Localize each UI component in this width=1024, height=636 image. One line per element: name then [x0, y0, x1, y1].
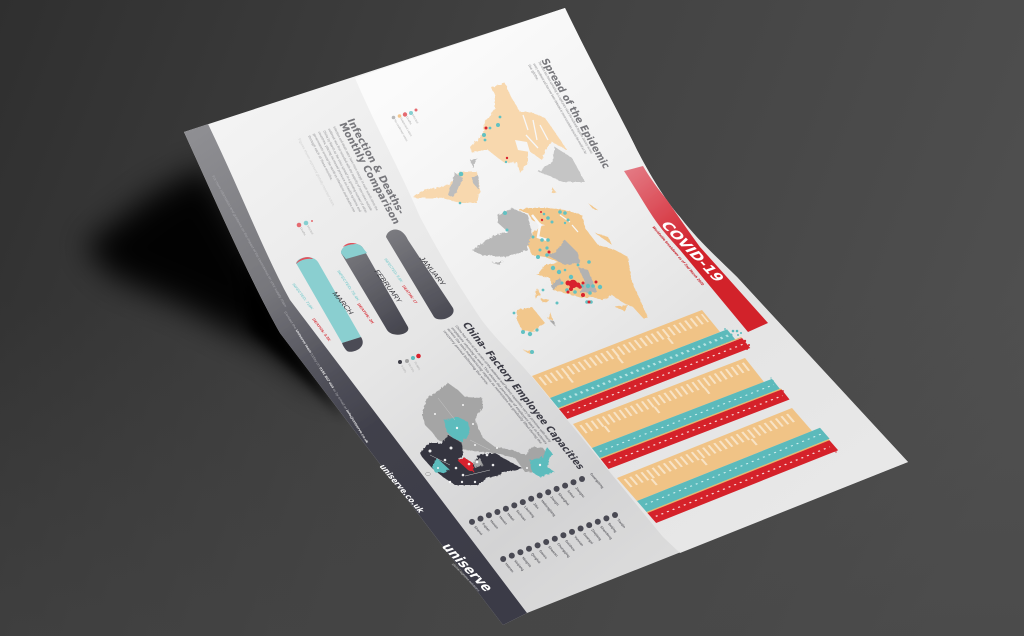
list: province dots row 1: Anhui: [566, 489, 576, 499]
list: province dots row 2: Beijing: [607, 522, 618, 533]
pill: February: DEATHS: 2K: [356, 303, 375, 325]
pill: February: INFECTED: 75.4K: [336, 270, 360, 301]
text: China description: China has been at the centre of the outbreak and factory capacities vary by province with many: [454, 325, 552, 443]
region: Hubei red: [457, 458, 474, 472]
legend: monthly comparison: [297, 220, 315, 237]
region group: teal east: [530, 447, 555, 477]
list: province dots row 1: Sichuan: [515, 509, 527, 522]
legend: world map: [392, 108, 420, 142]
list: province dots row 1: Shanxi: [473, 525, 483, 536]
region: central grey: [473, 458, 483, 468]
text: infection description: outbreak was first recorded with the majority of new cases outside: [327, 128, 373, 211]
list: province dots row 2: [500, 512, 626, 573]
band small print: [211, 175, 370, 444]
Hainan outline: [426, 472, 430, 476]
pill: January: JANUARY: [417, 256, 447, 287]
pill: January: DEATHS: 17: [401, 285, 418, 304]
text: spread description: The virus has been spreading at a rapid pace since the outbreak began in January across: [537, 61, 594, 154]
logo: global logistics solutions: [451, 563, 481, 592]
chart: China map: [420, 383, 555, 485]
list: province dots row 1: [469, 472, 605, 536]
legend: world map: Deaths: [405, 116, 413, 126]
banner: COVID-19: [624, 166, 768, 332]
pill: March: [291, 257, 363, 352]
legend: monthly comparison: Deaths: [299, 226, 307, 237]
logo: uniserve: [437, 542, 496, 593]
heading: Infection & Deaths: Monthly Comparison: [336, 121, 402, 226]
region borders: [430, 398, 490, 476]
region group: teal south: [432, 458, 450, 473]
pill: January: INFECTED: 9.8K: [383, 258, 404, 283]
list: province dots row 1: Heilongjiang: [540, 499, 556, 517]
list: province dots row 2: Chongqing: [556, 542, 571, 558]
text: China description: across the main manufacturing regions as restrictions are gradually lifted during the: [446, 328, 543, 444]
chart: country bars group 1: [532, 305, 750, 419]
list: province dots row 1: Jilin: [532, 502, 540, 510]
list: province dots row 1: Henan: [498, 515, 508, 526]
legend: China map: 75-90%: [413, 360, 422, 371]
poster sheet: [184, 8, 908, 625]
pill: March: DEATHS: 3.3K: [311, 318, 332, 342]
list: province dots row 2: Yunnan: [573, 535, 584, 547]
region group: dark: [420, 435, 522, 485]
paper shadow: [85, 165, 345, 420]
list: province dots row 1: Fujian: [481, 522, 491, 532]
list: province dots row 2: Ningxia: [521, 556, 532, 568]
list: province dots row 1: Liaoning: [523, 505, 535, 518]
legend: world map: No confirmed cases: [393, 118, 409, 142]
land masses: [413, 83, 648, 354]
heading: Spread of the Epidemic: Spread of the Epidemic: [538, 57, 612, 170]
banner title: COVID-19: [656, 220, 727, 284]
pill: January: [383, 229, 454, 319]
list: province dots row 2: Zhejiang: [590, 528, 602, 541]
pill: March: MARCH: [330, 291, 354, 315]
list: province dots row 2: Tianjin: [616, 518, 626, 529]
legend: world map: Suspected cases: [399, 116, 414, 137]
legend: world map: Infected: [411, 114, 420, 125]
panel: left column: [184, 8, 908, 625]
region markers: [428, 404, 541, 483]
banner subtitle: Worldwide breakdown as of 2nd March 2020: [651, 226, 705, 286]
heading: Infection & Deaths: Infection & Deaths-: [344, 117, 406, 216]
text: infection description: countries, placing increased pressure on health systems and: [317, 131, 362, 212]
legend: China map: [398, 354, 422, 374]
list: province dots row 2: Gansu: [538, 549, 548, 560]
text: spread description: the globe.: [527, 64, 540, 81]
list: province dots row 2: Xinjiang: [513, 559, 525, 572]
outbreak markers: [459, 116, 602, 354]
list: province dots row 1: Jiangxi: [549, 495, 560, 507]
list: province dots row 1: Guangdong: [589, 472, 605, 489]
text: China description: employees returning to work. This shows the percentage of employees back in factories: [450, 327, 548, 445]
legend: monthly comparison: Infected: [306, 224, 315, 236]
text: infection description: China by March as the virus spread to a growing number of other: [322, 130, 368, 214]
text: infection description: through each of these months.: [307, 135, 334, 181]
lake: [515, 140, 530, 152]
chart: monthly pills: [291, 229, 454, 352]
text: spread description: [527, 61, 594, 155]
text: infection description: Figures shown represent globally reported totals.: [297, 138, 336, 207]
text: infection description: Infection and death rates have risen sharply in each month since the: [332, 126, 379, 211]
heading: China factory capacities: China- Factory Employee Capacities: [459, 321, 586, 471]
list: province dots row 1: Shanghai: [557, 492, 570, 506]
chart: country bars group 2: [573, 354, 790, 469]
web address: uniserve.co.uk: [376, 464, 426, 514]
pill: February: FEBRUARY: [372, 269, 403, 304]
list: province dots row 2: Qinghai: [530, 552, 541, 564]
lakes and sea gaps: [523, 115, 578, 240]
text: China description: recovery period following the virus.: [442, 330, 490, 386]
legend: China map: 50-75%: [407, 362, 416, 373]
text: infection description: governments around the world as infections and deaths rise: [312, 133, 356, 213]
chart: world map: [413, 83, 648, 354]
band small print: For more information and guidance on the impact of the coronavirus on your supply chain: [211, 175, 288, 308]
bar tips group 1: [724, 328, 750, 350]
list: province dots row 1: Jiangsu: [574, 486, 586, 498]
pill: March: INFECTED: 719K: [291, 283, 314, 310]
list: province dots row 1: Hunan: [489, 519, 499, 530]
text: infection description: [297, 126, 379, 214]
list: province dots row 1: Hebei: [506, 512, 515, 522]
list: province dots row 2: Shandong: [599, 525, 613, 540]
pill: February: [336, 243, 408, 335]
list: province dots row 2: Guangxi: [582, 532, 594, 545]
region group: grey: [422, 383, 548, 472]
bar tips group 2: [770, 377, 786, 397]
list: province dots row 2: Guizhou: [564, 539, 576, 552]
chart: country bars group 3: [617, 405, 839, 523]
bar tips group 3: [814, 430, 837, 453]
list: province dots row 2: Shaanxi: [547, 545, 559, 558]
legend: China map: 0-50%: [400, 364, 408, 374]
band small print: Contact the Uniserve team today on 0151 807 444 or by email at info@uniserve.co.uk: [283, 311, 370, 444]
footer band: [184, 124, 527, 625]
panel: right column: [355, 8, 908, 553]
text: spread description: every continent and has now been detected in most countries around the world so far: [532, 63, 588, 155]
region group: teal north: [444, 417, 470, 442]
list: province dots row 2: Hainan: [504, 562, 515, 573]
